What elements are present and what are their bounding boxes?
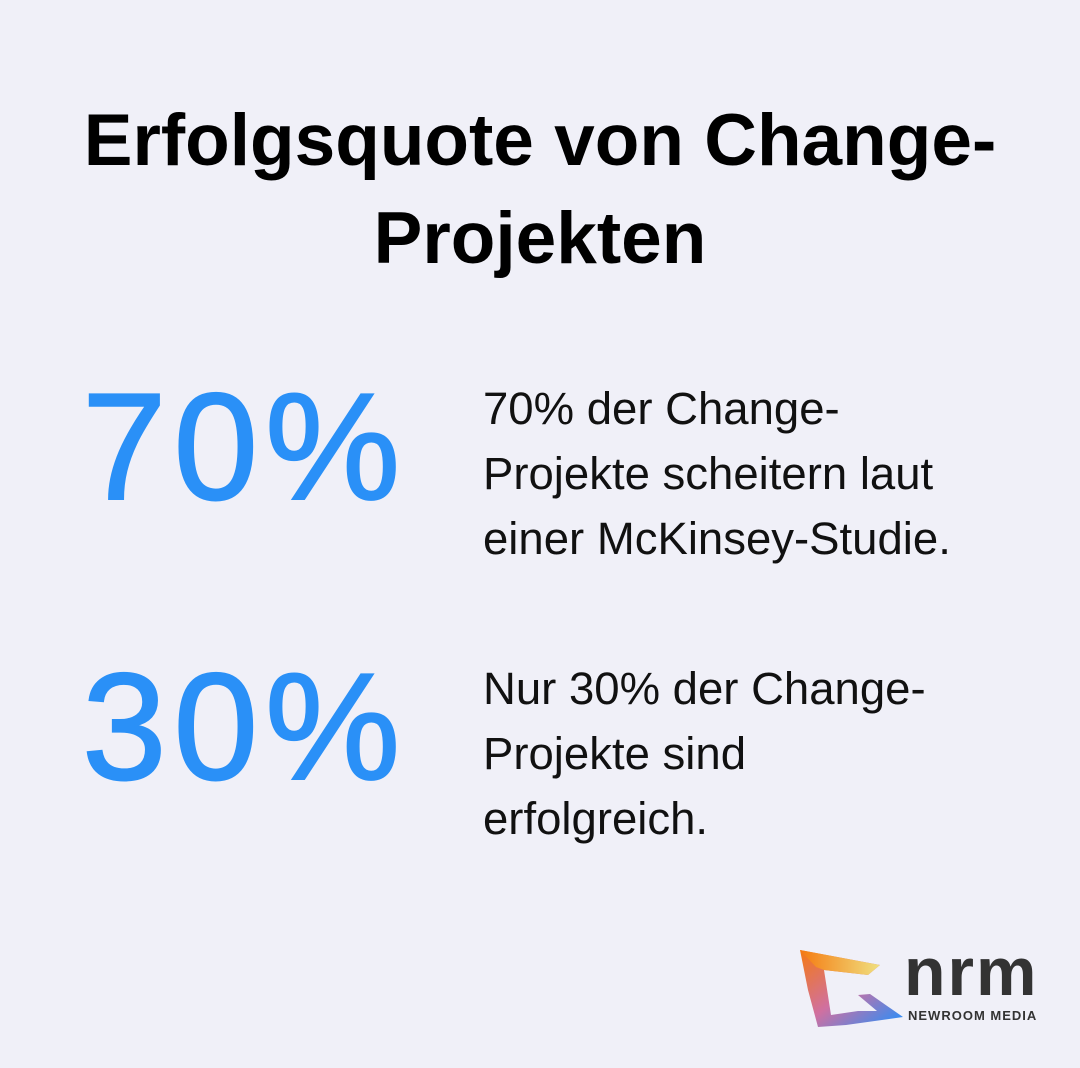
stat text: 30%: Nur 30% der Change-	[483, 663, 926, 714]
logo: newroom media	[800, 934, 1038, 1027]
title	[84, 100, 996, 279]
stat number: 70%: 70%	[82, 362, 407, 532]
title: Projekten	[374, 198, 706, 279]
icon: logo mark	[800, 950, 903, 1027]
title: Erfolgsquote von Change-	[84, 100, 996, 181]
stat text: 30%	[483, 663, 926, 844]
stat number: 30%: 30%	[82, 642, 407, 812]
logo: newroom media: NEWROOM MEDIA	[908, 1008, 1037, 1023]
logo text: nrm	[904, 934, 1038, 1010]
stat text: 70%: einer McKinsey-Studie.	[483, 513, 951, 564]
stat text: 30%: Projekte sind	[483, 728, 746, 779]
stat text: 70%: 70% der Change-	[483, 383, 840, 434]
stat text: 70%	[483, 383, 951, 564]
stat text: 70%: Projekte scheitern laut	[483, 448, 933, 499]
stat text: 30%: erfolgreich.	[483, 793, 708, 844]
